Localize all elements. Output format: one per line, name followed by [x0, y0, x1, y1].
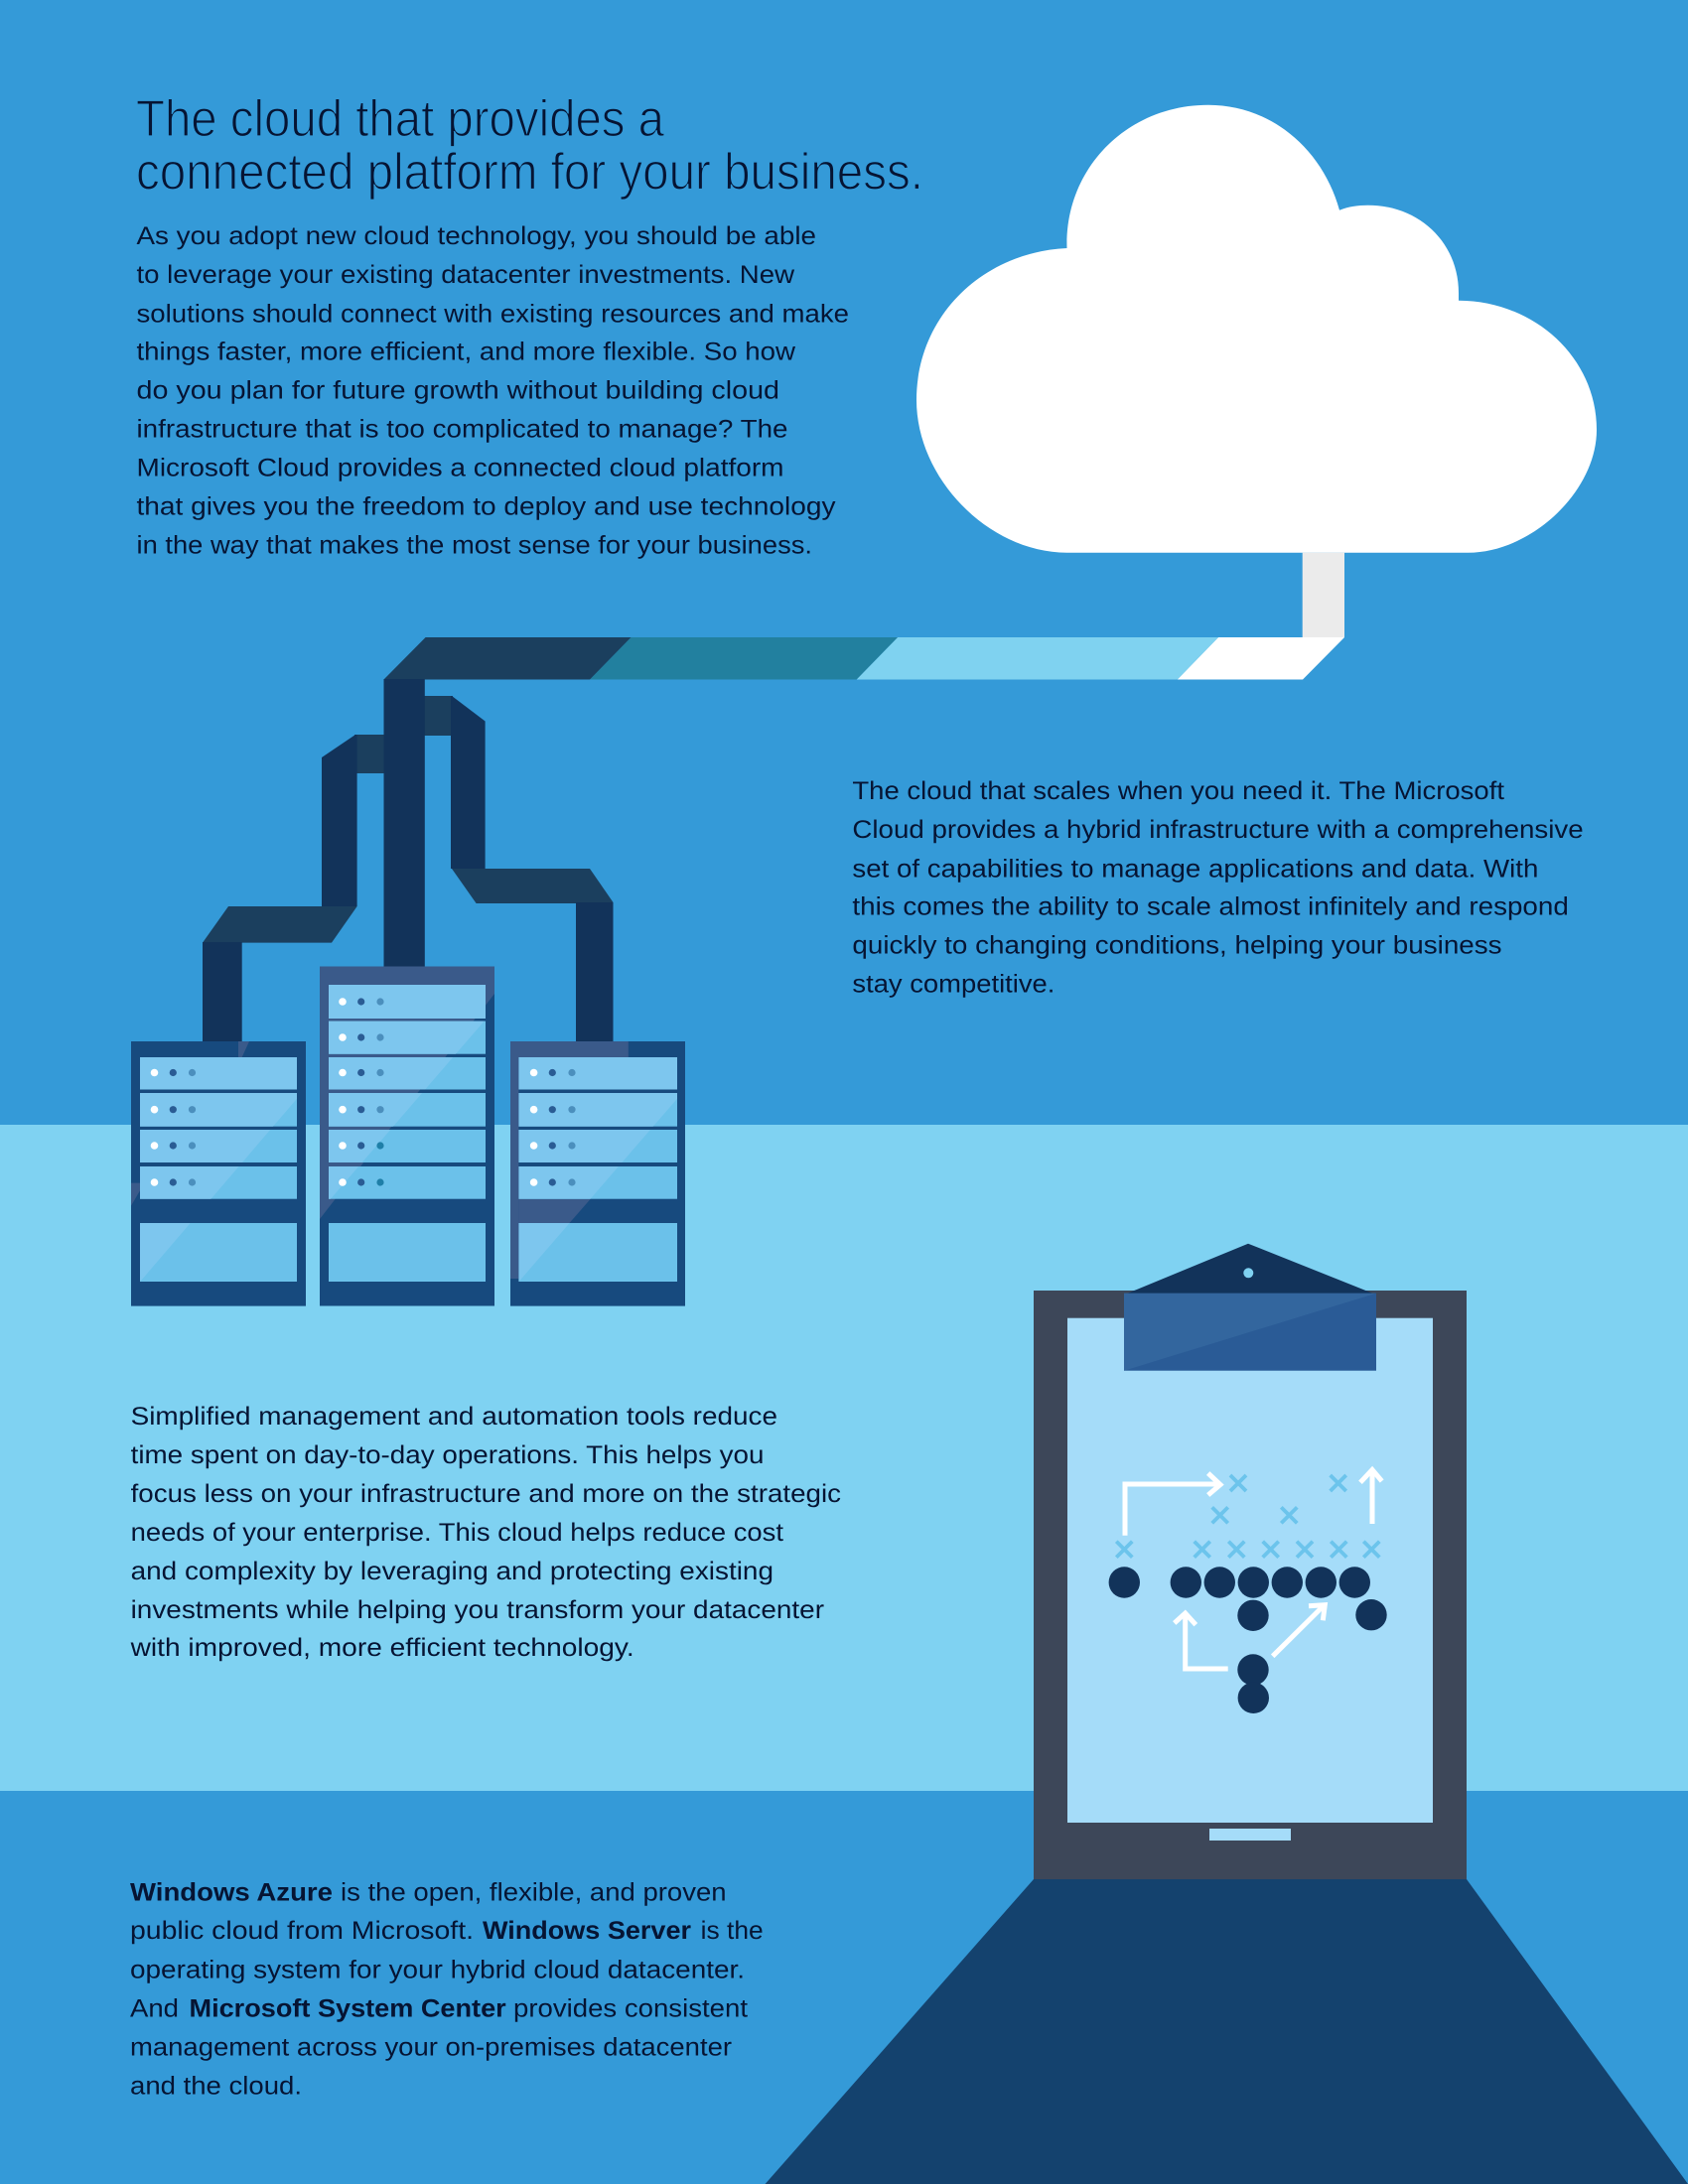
text block: products paragraph: operating system for your hybrid cloud datacenter.: [130, 1957, 745, 1984]
icon: tablet stand: [766, 1879, 1688, 2184]
text block: management paragraph: focus less on your infrastructure and more on the strategic: [131, 1480, 841, 1508]
text block: intro paragraph: [137, 222, 849, 559]
text block: products paragraph: and the cloud.: [130, 2072, 302, 2100]
panel: top blue background: [0, 0, 1688, 1125]
text block: scaling paragraph: The cloud that scales when you need it. The Microsoft: [852, 777, 1504, 805]
icon: center server rack: [320, 967, 494, 1306]
text block: scaling paragraph: quickly to changing conditions, helping your business: [852, 932, 1502, 960]
text block: intro paragraph: Microsoft Cloud provides a connected cloud platform: [137, 454, 784, 481]
text block: intro paragraph: solutions should connect with existing resources and make: [137, 300, 849, 328]
text block: scaling paragraph: set of capabilities to manage applications and data. With: [852, 855, 1538, 883]
text block: products paragraph: [130, 1878, 764, 2100]
home button: [1209, 1829, 1291, 1841]
text block: management paragraph: investments while helping you transform your datacenter: [131, 1596, 825, 1624]
play diagram: arrows: [1125, 1469, 1382, 1669]
text block: products paragraph: Microsoft System Center: [189, 1995, 506, 2023]
text block: intro paragraph: things faster, more efficient, and more flexible. So how: [137, 339, 796, 366]
text block: intro paragraph: do you plan for future growth without building cloud: [137, 377, 779, 405]
text block: intro paragraph: to leverage your existing datacenter investments. New: [137, 261, 795, 289]
text block: intro paragraph: that gives you the freedom to deploy and use technology: [137, 492, 836, 520]
icon: clipboard tablet: [1034, 1244, 1467, 1879]
text block: management paragraph: with improved, more efficient technology.: [129, 1634, 634, 1662]
text block: products paragraph: public cloud from Microsoft.: [130, 1917, 474, 1945]
text block: products paragraph: is the open, flexible, and proven: [341, 1878, 727, 1906]
text block: scaling paragraph: [852, 777, 1584, 998]
play diagram: offense circles: [1109, 1567, 1387, 1713]
panel: middle light blue band: [0, 1125, 1688, 1791]
text block: scaling paragraph: stay competitive.: [852, 970, 1055, 998]
text block: scaling paragraph: this comes the ability to scale almost infinitely and respond: [852, 893, 1569, 921]
connector: ribbon from cloud to servers: [203, 553, 1344, 1041]
play diagram: defense crosses: [1116, 1475, 1379, 1558]
text block: management paragraph: [129, 1403, 841, 1662]
title: connected platform for your business.: [136, 144, 923, 202]
text block: products paragraph: management across your on-premises datacenter: [130, 2034, 733, 2062]
title: The cloud that provides a: [136, 90, 664, 148]
text block: products paragraph: Windows Server: [483, 1917, 691, 1945]
icon: left server rack: [131, 1041, 306, 1306]
left branch: [203, 735, 384, 1041]
icon: cloud: [916, 105, 1597, 553]
text block: products paragraph: And: [130, 1995, 179, 2023]
text block: products paragraph: Windows Azure: [130, 1878, 333, 1906]
text block: management paragraph: time spent on day-to-day operations. This helps you: [131, 1441, 765, 1469]
text block: scaling paragraph: Cloud provides a hybrid infrastructure with a comprehensive: [852, 816, 1584, 844]
title: [136, 90, 923, 202]
text block: products paragraph: provides consistent: [513, 1995, 748, 2023]
right branch: [422, 696, 614, 1041]
clipboard frame: [1034, 1291, 1467, 1879]
clip top triangle: [1127, 1244, 1373, 1294]
clip plate: [1124, 1294, 1376, 1371]
text block: products paragraph: is the: [701, 1917, 764, 1945]
clip hole: [1243, 1268, 1253, 1278]
text block: management paragraph: Simplified management and automation tools reduce: [131, 1403, 777, 1431]
panel: bottom blue band: [0, 1791, 1688, 2184]
text block: intro paragraph: in the way that makes the most sense for your business.: [137, 531, 812, 559]
text block: intro paragraph: As you adopt new cloud technology, you should be able: [137, 222, 816, 250]
text block: intro paragraph: infrastructure that is too complicated to manage? The: [137, 416, 788, 444]
clipboard paper: [1067, 1318, 1433, 1823]
center trunk: [383, 679, 425, 967]
text block: management paragraph: needs of your enterprise. This cloud helps reduce cost: [131, 1519, 783, 1547]
icon: right server rack: [510, 1041, 685, 1306]
text block: management paragraph: and complexity by leveraging and protecting existing: [131, 1558, 774, 1585]
